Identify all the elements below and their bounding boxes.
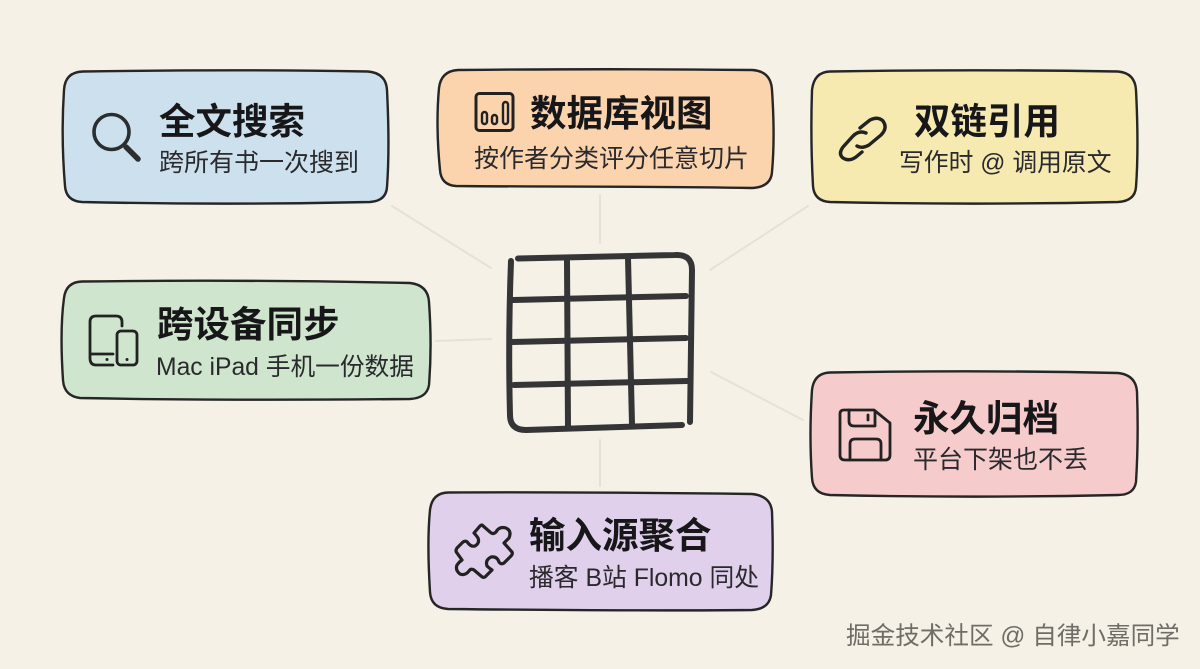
icon: magnifier bbox=[94, 114, 138, 159]
text: Mac iPad 手机一份数据 bbox=[156, 353, 414, 381]
panel: permanent archive bbox=[810, 371, 1138, 496]
heading: 跨设备同步 bbox=[157, 304, 340, 345]
text: 播客 B站 Flomo 同处 bbox=[529, 564, 759, 592]
icon: chart bbox=[476, 94, 513, 130]
heading: 永久归档 bbox=[913, 398, 1059, 439]
icon: devices bbox=[90, 316, 137, 365]
text: 跨所有书一次搜到 bbox=[159, 149, 359, 177]
watermark: 掘金技术社区 @ 自律小嘉同学 bbox=[846, 622, 1180, 650]
text: 写作时 @ 调用原文 bbox=[899, 149, 1112, 177]
icon: floppy disk bbox=[840, 410, 890, 460]
heading: 数据库视图 bbox=[530, 93, 712, 134]
panel: input aggregation bbox=[428, 492, 773, 610]
heading: 双链引用 bbox=[914, 101, 1060, 142]
panel: cross-device sync bbox=[62, 281, 430, 400]
connector lines bbox=[392, 195, 808, 486]
heading: 输入源聚合 bbox=[529, 515, 712, 556]
panel: bidirectional links bbox=[811, 70, 1138, 204]
central grid icon bbox=[509, 255, 692, 430]
panel: full-text search bbox=[63, 70, 388, 204]
panel: database views bbox=[438, 69, 774, 188]
icon: link bbox=[840, 118, 885, 160]
icon: puzzle piece bbox=[456, 525, 512, 577]
text: 平台下架也不丢 bbox=[913, 446, 1088, 474]
heading: 全文搜索 bbox=[159, 101, 305, 142]
text: 按作者分类评分任意切片 bbox=[474, 145, 749, 173]
